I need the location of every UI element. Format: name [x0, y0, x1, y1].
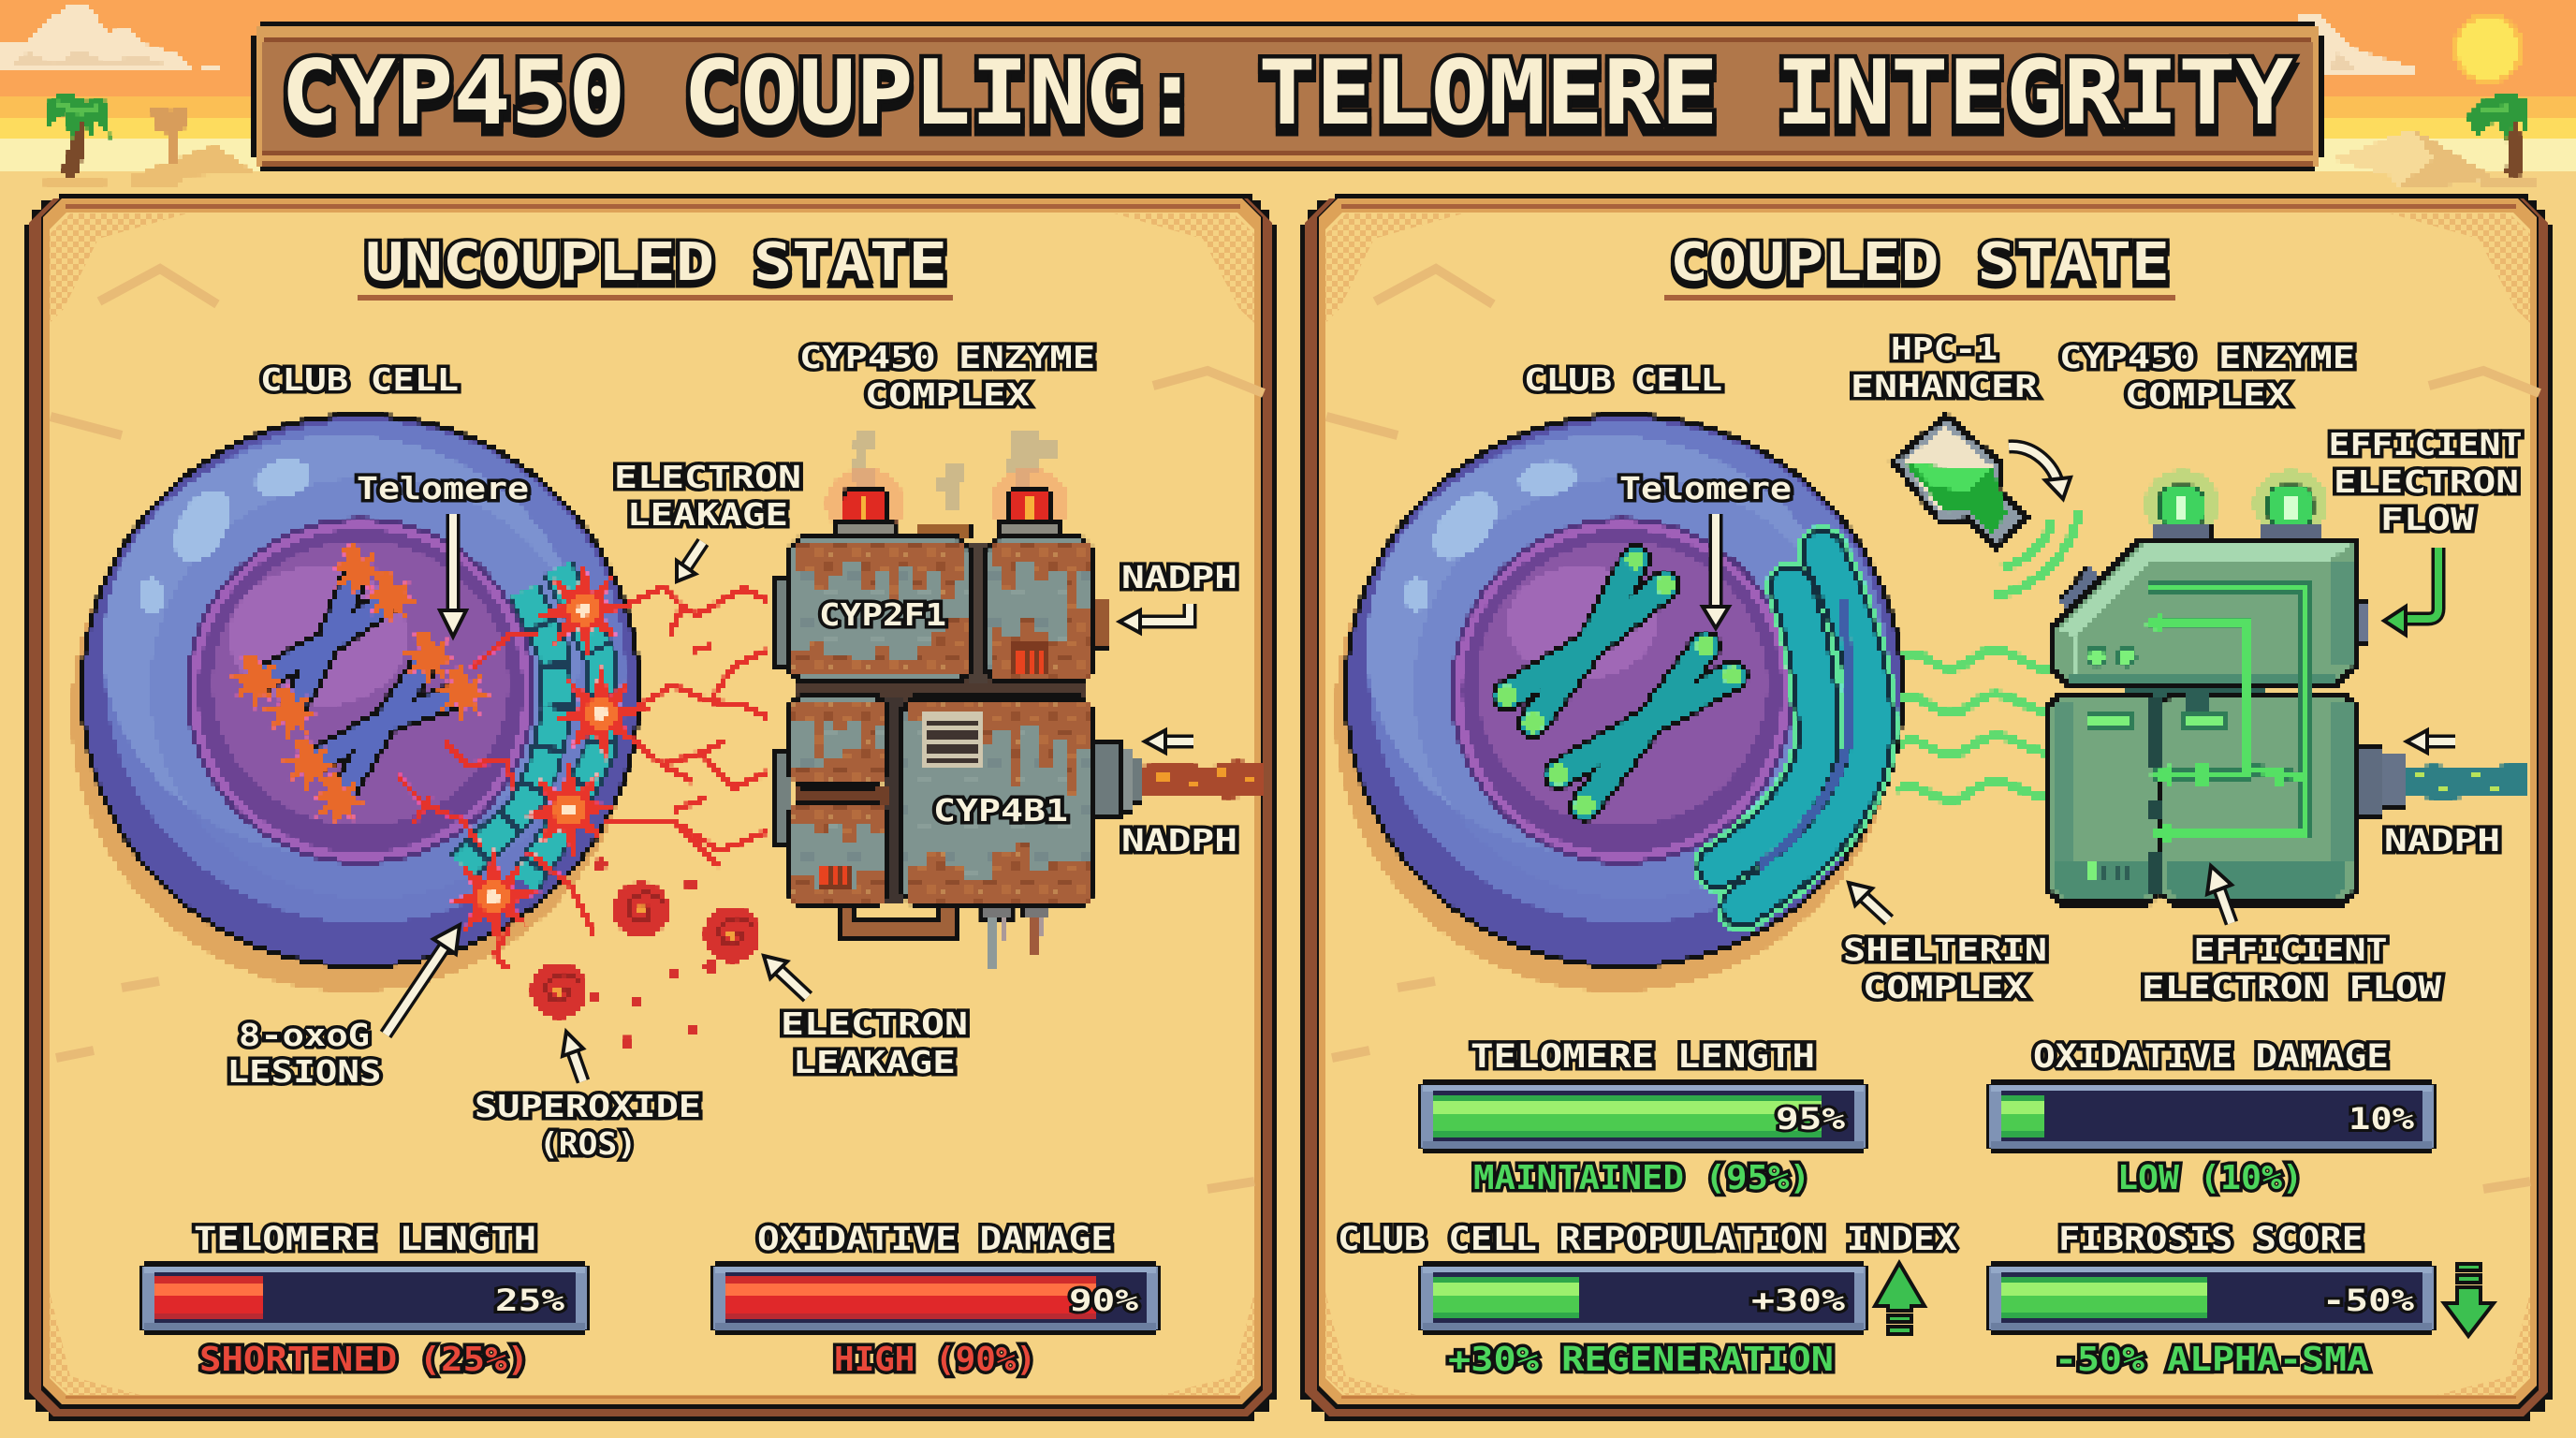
- bar: -50%: -50%: [2322, 1283, 2415, 1318]
- label: CYP4B1: CYP4B1: [933, 792, 1068, 829]
- bar: -50%: [1986, 1261, 2437, 1335]
- label: superoxide ROS: (ROS): [539, 1125, 637, 1162]
- scenery: clouds, palms, dunes and sun: [0, 5, 2539, 189]
- label: 8-oxoG lesions: 8-oxoG: [239, 1017, 370, 1053]
- panel: coupled state: [1300, 194, 2553, 1421]
- label: electron leakage upper: ELECTRON: [614, 459, 801, 495]
- label: electron leakage upper: [614, 459, 801, 533]
- body: [2125, 682, 2265, 697]
- metric: telomere length: SHORTENED (25%): [199, 1341, 529, 1379]
- icon: right cloud: [2298, 16, 2413, 75]
- arrow: NADPH upper: [1120, 604, 1190, 633]
- label: efficient electron flow right: FLOW: [2380, 501, 2474, 537]
- arrow: potion curved: [2009, 447, 2071, 499]
- blocks: [788, 537, 1093, 905]
- illustration: damaged club cell: [71, 413, 768, 1048]
- bar: +30%: +30%: [1751, 1283, 1846, 1318]
- label: efficient electron flow lower: EFFICIENT: [2194, 932, 2387, 968]
- illustration: green electron waves: [1896, 510, 2079, 800]
- label: efficient electron flow right: EFFICIENT: [2329, 426, 2522, 462]
- label: HPC-1 enhancer: ENHANCER: [1851, 368, 2038, 404]
- label: shelterin complex: [1843, 932, 2047, 1005]
- label: CYP450 enzyme complex: COMPLEX: [2125, 376, 2290, 413]
- metric: telomere length: TELOMERE LENGTH: [1471, 1038, 1815, 1076]
- label: NADPH: NADPH: [2384, 822, 2500, 858]
- pipe: [2404, 763, 2525, 800]
- label: NADPH upper: NADPH: [1121, 559, 1237, 595]
- pipe: [1143, 760, 1265, 799]
- arrow: telomere: [1703, 514, 1729, 628]
- metric: telomere length: [139, 1221, 590, 1379]
- label: shelterin complex: COMPLEX: [1863, 969, 2027, 1005]
- metric: club cell repopulation index: +30% REGENERATION: [1448, 1341, 1834, 1379]
- side parts: [772, 576, 791, 668]
- label: superoxide ROS: SUPEROXIDE: [475, 1088, 701, 1124]
- broken shelterin: [462, 567, 601, 883]
- label: CYP450 enzyme complex: CYP450 ENZYME: [799, 339, 1095, 375]
- label: telomere: Telomere: [1619, 470, 1792, 506]
- arrow: green electron flow: [2384, 548, 2438, 635]
- arrow: shelterin: [1849, 883, 1889, 920]
- lightning: [624, 587, 768, 635]
- bar: 90%: 90%: [1069, 1283, 1139, 1318]
- rust: [792, 543, 1090, 902]
- icon: down arrow: [2444, 1264, 2494, 1336]
- label: efficient electron flow lower: [2142, 932, 2441, 1005]
- metric: club cell repopulation index: CLUB CELL REPOPULATION INDEX: [1338, 1221, 1957, 1258]
- label: CYP450 enzyme complex: COMPLEX: [865, 376, 1030, 413]
- label: club cell: CLUB CELL: [1524, 361, 1722, 398]
- illustration: healthy club cell: [1335, 413, 1905, 991]
- metric: fibrosis score: [1986, 1221, 2494, 1379]
- label: electron leakage upper: LEAKAGE: [627, 496, 788, 533]
- arrow: telomere: [440, 514, 466, 637]
- label: efficient electron flow right: ELECTRON: [2334, 463, 2519, 500]
- ROS spirals: [613, 882, 669, 938]
- metric: club cell repopulation index: [1338, 1221, 1957, 1379]
- icon: left palm: [45, 92, 110, 176]
- lights: [826, 468, 904, 539]
- metric: fibrosis score: FIBROSIS SCORE: [2058, 1221, 2364, 1258]
- metric: oxidative damage: [710, 1221, 1161, 1379]
- bar: 25%: 25%: [495, 1283, 565, 1318]
- arrow: superoxide: [563, 1032, 583, 1081]
- bar: 10%: [1986, 1079, 2437, 1153]
- icon: faded palm: [150, 106, 187, 164]
- chromosomes: [1507, 560, 1733, 806]
- heading: coupled state: COUPLED STATE: [1670, 232, 2170, 293]
- icon: sun: [2452, 13, 2524, 84]
- label: CYP450 enzyme complex: [799, 339, 1095, 413]
- metric: oxidative damage: LOW (10%): [2117, 1159, 2303, 1197]
- arrow: efficient flow lower: [2207, 866, 2232, 923]
- bar: 10%: 10%: [2349, 1101, 2415, 1137]
- bottom pipe and drips: [847, 906, 947, 929]
- label: CYP2F1: CYP2F1: [819, 596, 946, 633]
- arrow: lesions: [386, 925, 460, 1034]
- metric: oxidative damage: HIGH (90%): [834, 1341, 1036, 1379]
- label: 8-oxoG lesions: LESIONS: [227, 1053, 382, 1090]
- label: efficient electron flow lower: ELECTRON FLOW: [2142, 969, 2441, 1005]
- title banner: [251, 22, 2324, 171]
- bar: 25%: [139, 1261, 590, 1335]
- title text: CYP450 COUPLING: TELOMERE INTEGRITY: [281, 42, 2293, 145]
- gaps: [796, 679, 1086, 702]
- panel: uncoupled state: [24, 194, 1277, 1421]
- arrow: electron leakage upper: [677, 542, 703, 581]
- bar: 90%: [710, 1261, 1161, 1335]
- label: club cell: CLUB CELL: [260, 361, 459, 398]
- icon: right palm: [2466, 92, 2539, 188]
- chromosome outlines: [256, 571, 462, 800]
- metric: telomere length: TELOMERE LENGTH: [194, 1221, 536, 1258]
- label: electron leakage lower: [781, 1005, 968, 1080]
- knob: [2067, 573, 2097, 607]
- metric: oxidative damage: [1986, 1038, 2437, 1197]
- arrow: NADPH: [2407, 730, 2455, 753]
- icon: right dune: [2331, 129, 2495, 187]
- label: electron leakage lower: LEAKAGE: [793, 1044, 956, 1080]
- heading: uncoupled state: UNCOUPLED STATE: [365, 232, 947, 293]
- label: 8-oxoG lesions: [227, 1017, 382, 1090]
- label: CYP450 enzyme complex: CYP450 ENZYME: [2059, 339, 2355, 375]
- lights: [2144, 470, 2219, 537]
- metric: oxidative damage: OXIDATIVE DAMAGE: [757, 1221, 1113, 1258]
- arrow: NADPH lower: [1145, 730, 1193, 753]
- icon: left cloud: [0, 5, 220, 70]
- label: telomere: Telomere: [357, 470, 529, 506]
- metric: oxidative damage: OXIDATIVE DAMAGE: [2033, 1038, 2389, 1076]
- icon: left dune: [42, 145, 253, 189]
- bar: 95%: 95%: [1776, 1101, 1846, 1137]
- icon: up arrow: [1875, 1263, 1925, 1334]
- label: electron leakage lower: ELECTRON: [781, 1005, 968, 1042]
- bursts: [446, 561, 650, 946]
- shelterin complex: [1742, 551, 1872, 906]
- label: superoxide ROS: [475, 1088, 701, 1162]
- label: NADPH lower: NADPH: [1121, 822, 1237, 858]
- illustration: green CYP450 enzyme complex: [2049, 470, 2525, 903]
- bar: +30%: [1418, 1261, 1868, 1335]
- illustration: rusted CYP450 enzyme complex: [772, 433, 1265, 971]
- metric: telomere length: [1418, 1038, 1868, 1197]
- circuits: [2146, 587, 2305, 833]
- metric: telomere length: MAINTAINED (95%): [1473, 1159, 1810, 1197]
- label: shelterin complex: SHELTERIN: [1843, 932, 2047, 968]
- metric: fibrosis score: -50% ALPHA-SMA: [2055, 1341, 2369, 1379]
- bar: 95%: [1418, 1079, 1868, 1153]
- icon: HPC-1 enhancer potion: [1893, 416, 2027, 548]
- label: HPC-1 enhancer: HPC-1: [1891, 330, 1998, 367]
- label: efficient electron flow right: [2329, 426, 2522, 537]
- arrow: electron leakage lower: [764, 956, 808, 997]
- label: HPC-1 enhancer: [1851, 330, 2038, 404]
- label: CYP450 enzyme complex: [2059, 339, 2355, 413]
